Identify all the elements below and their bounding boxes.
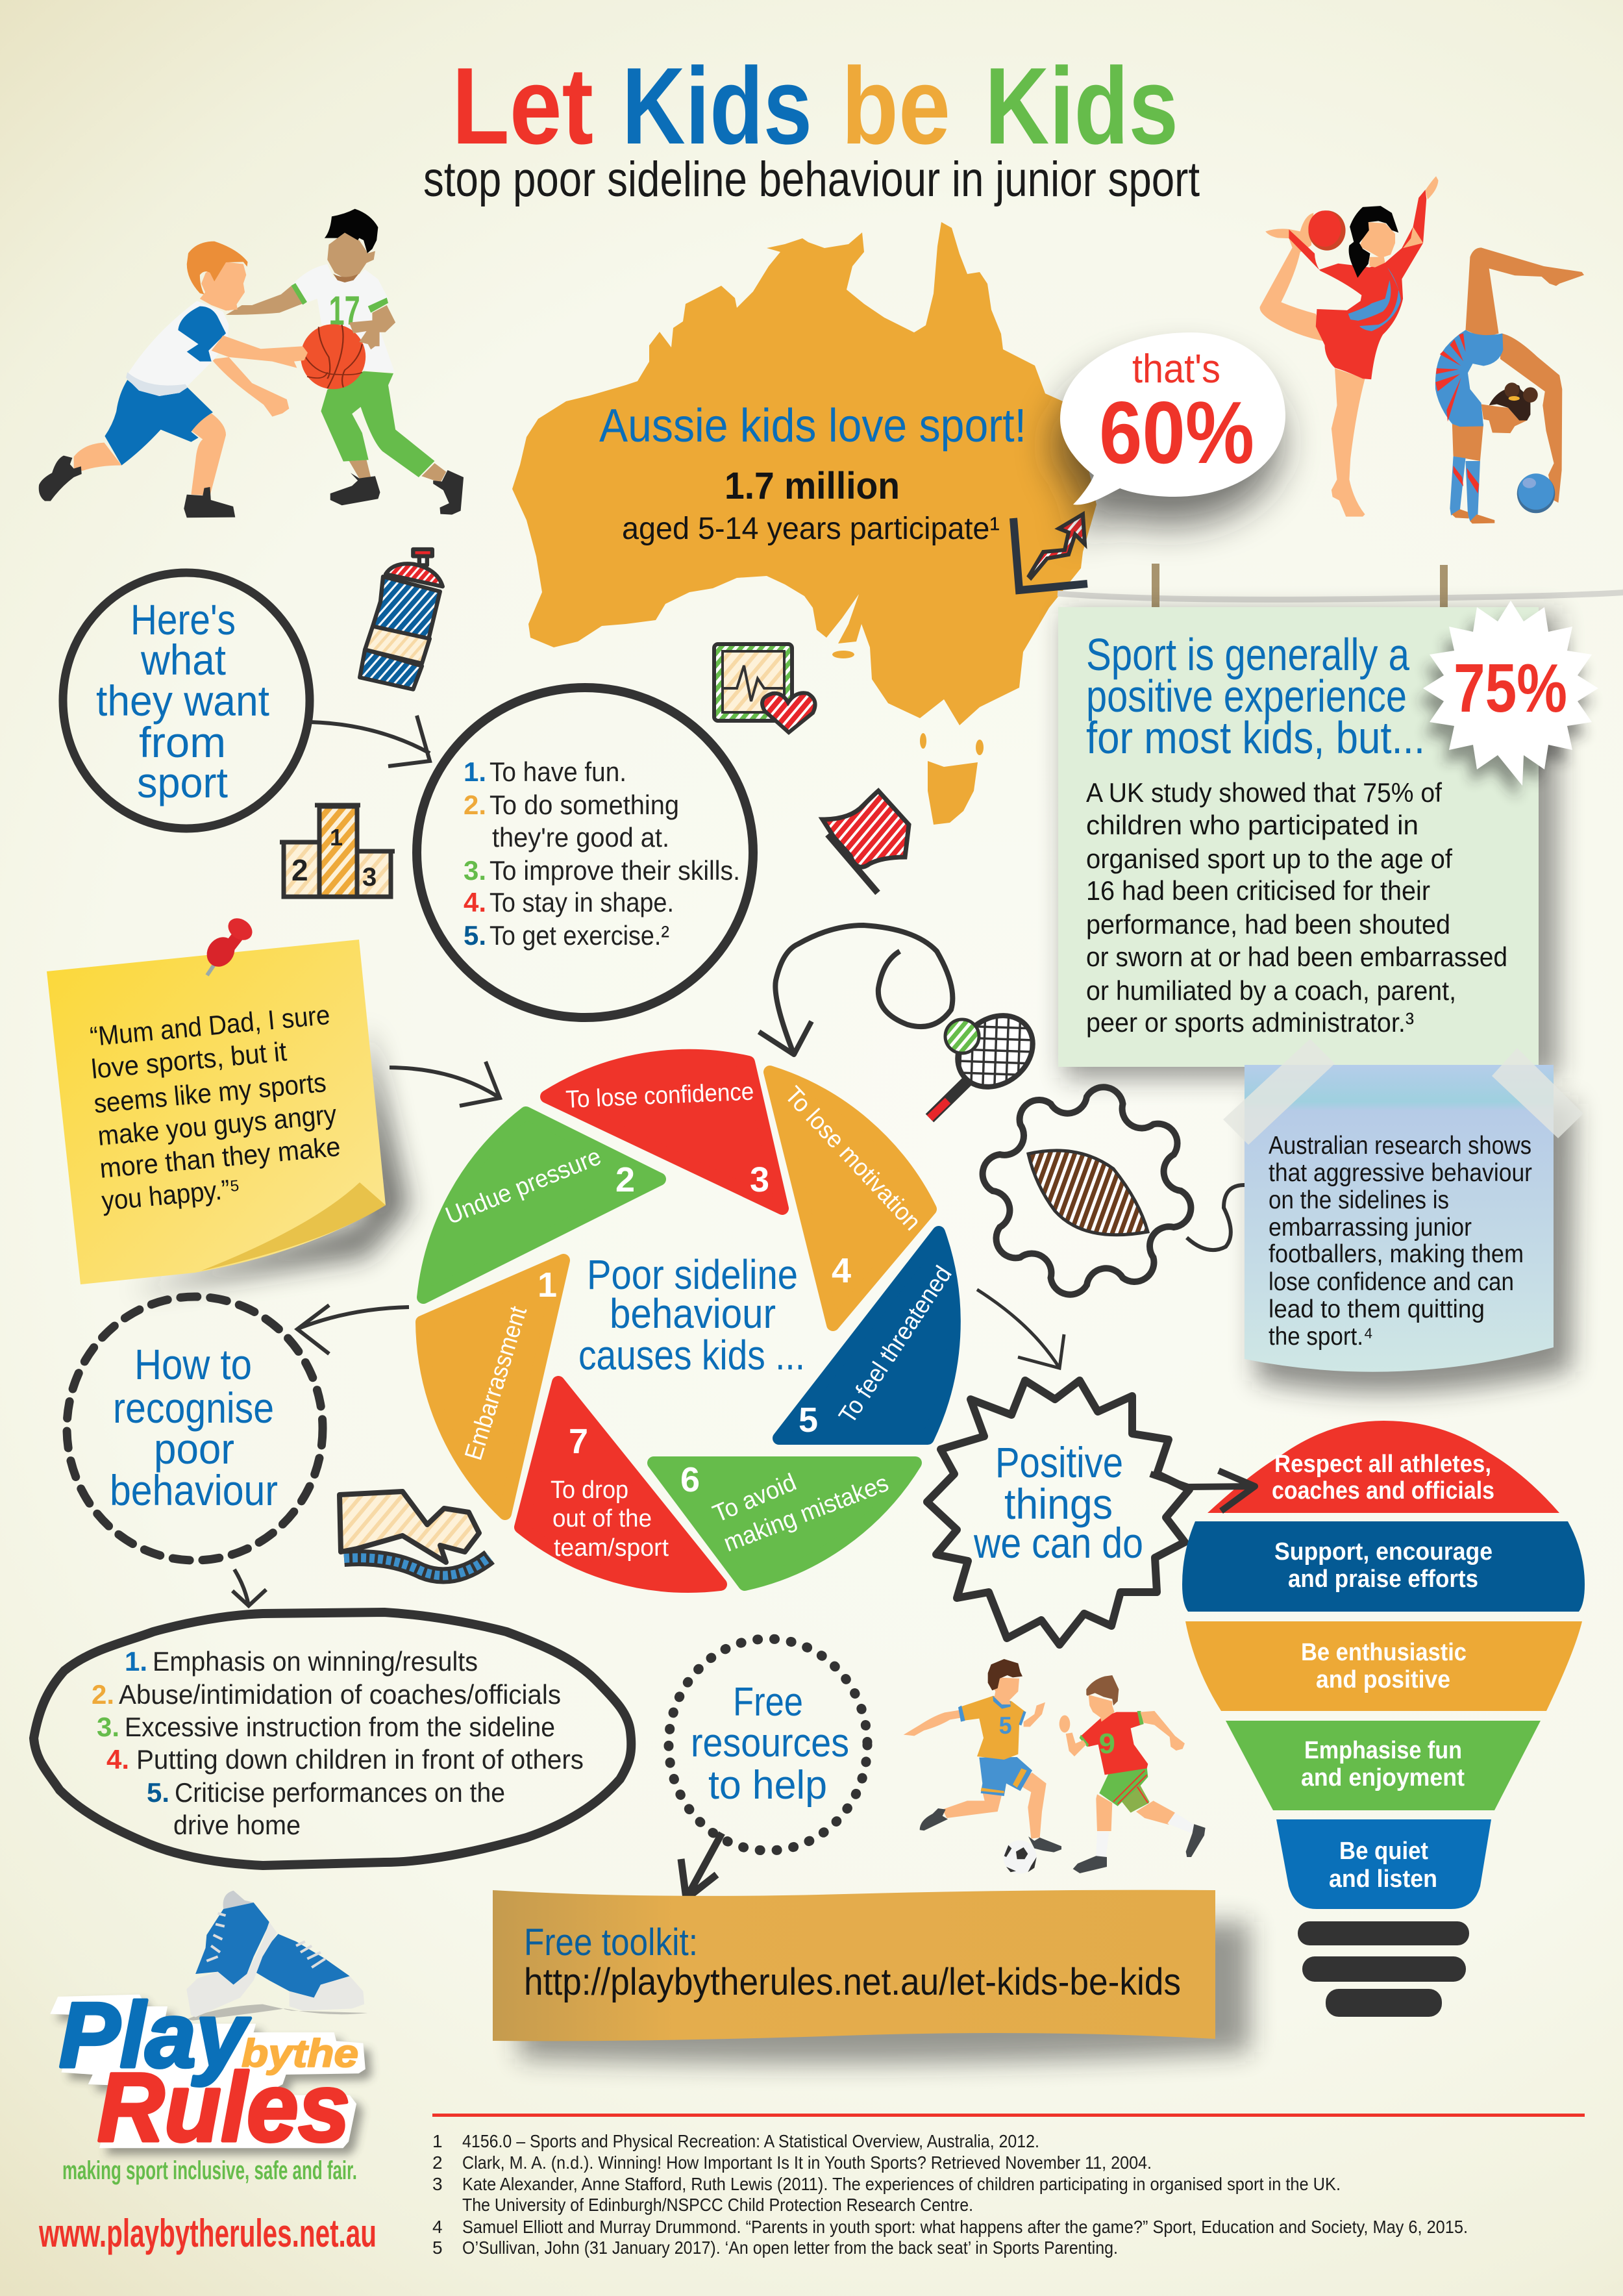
connector: football to note xyxy=(1187,1185,1245,1250)
body text: peer or sports administrator.³ xyxy=(1086,1007,1414,1038)
bulb segment respect: coaches and officials xyxy=(1272,1477,1494,1504)
wheel segment 6 avoid mistakes: making mistakes xyxy=(720,1469,892,1557)
callout: that's 60% xyxy=(1055,332,1285,532)
boy with dark hair: 17 xyxy=(328,288,360,334)
wheel segment 7 drop out xyxy=(521,1382,721,1586)
wheel segment 2 undue pressure xyxy=(423,1113,660,1297)
icon: flag xyxy=(823,791,909,893)
tape strips xyxy=(1223,1039,1583,1145)
illustration: kids playing basketball xyxy=(39,209,464,518)
circle: how to recognise poor behaviour xyxy=(67,1297,323,1560)
bulb segment quiet: and listen xyxy=(1329,1866,1437,1893)
map text xyxy=(599,400,1026,546)
body text: or sworn at or had been embarrassed xyxy=(1086,942,1507,972)
footnotes: 4156.0 – Sports and Physical Recreation: A Statistical Overview, Australia, 2012. xyxy=(462,2131,1039,2151)
heading: positive experience xyxy=(1086,671,1407,721)
circle: wants list: 1. xyxy=(464,756,486,787)
body text: performance, had been shouted xyxy=(1086,909,1450,940)
map text: Aussie kids love sport! xyxy=(599,400,1026,452)
note text: lose confidence and can xyxy=(1269,1268,1514,1296)
icon: push pin xyxy=(201,914,256,975)
illustration: rhythmic gymnasts xyxy=(1260,176,1584,523)
oval: behaviour list: drive home xyxy=(173,1810,301,1840)
boy with dark hair xyxy=(226,209,464,515)
oval: behaviour list: 3. xyxy=(97,1712,119,1742)
circle: free resources: Free xyxy=(733,1680,803,1725)
quote text: more than they make xyxy=(98,1131,341,1184)
note text: embarrassing junior xyxy=(1269,1214,1472,1242)
circle: wants list xyxy=(417,688,753,1017)
panel: free toolkit: http://playbytherules.net.au/let-kids-be-kids xyxy=(524,1961,1181,2003)
icon: podium: 3 xyxy=(362,863,377,892)
footnotes: 3 xyxy=(432,2174,443,2194)
boy with orange hair xyxy=(39,242,308,518)
oval: behaviour list: Excessive instruction from the sideline xyxy=(125,1712,555,1742)
circle: how to recognise poor behaviour: How to xyxy=(134,1340,252,1388)
quote text xyxy=(88,999,341,1216)
footnotes: Samuel Elliott and Murray Drummond. “Parents in youth sport: what happens after the game?” Sport, Education and Society, May 6, 2015. xyxy=(462,2217,1468,2237)
title: be xyxy=(841,45,950,167)
clothesline with pegs xyxy=(1058,564,1623,616)
bulb segment fun xyxy=(1226,1721,1541,1810)
bulb base xyxy=(1298,1921,1469,2017)
image: blue shoes xyxy=(186,1891,367,2021)
bulb segment support: Support, encourage xyxy=(1274,1538,1493,1566)
arrow: wheel to positive things xyxy=(977,1290,1064,1368)
circle: wants list: 2. xyxy=(464,790,486,820)
logo: Play by the Rules: Play xyxy=(59,1984,251,2087)
title xyxy=(452,45,1178,167)
heading: Sport is generally a xyxy=(1086,629,1409,680)
note text xyxy=(1269,1132,1532,1351)
circle: wants list: 4. xyxy=(464,887,486,917)
gymnast in blue xyxy=(1435,247,1584,523)
icon: football in wavy outline xyxy=(983,1087,1191,1295)
callout: that's 60%: 60% xyxy=(1099,383,1254,482)
icon: heart monitor xyxy=(714,644,815,732)
wheel segment 1 embarrassment xyxy=(422,1260,564,1514)
bulb segment quiet xyxy=(1276,1819,1491,1909)
oval: behaviour list: Putting down children in front of others xyxy=(136,1744,584,1775)
circle: how to recognise poor behaviour: behaviour xyxy=(110,1466,278,1514)
bulb segment fun: and enjoyment xyxy=(1301,1764,1465,1791)
boy in red shirt xyxy=(1059,1675,1206,1873)
oval: behaviour list: Criticise performances on the xyxy=(175,1777,505,1808)
circle: here's what they want: they want xyxy=(96,677,269,725)
sticky note: quote xyxy=(47,914,409,1292)
note text: Australian research shows xyxy=(1269,1132,1531,1160)
map text: 1.7 million xyxy=(725,465,900,507)
bulb segment support: and praise efforts xyxy=(1288,1566,1478,1593)
circle: wants list: To have fun. xyxy=(489,756,626,787)
wheel segment 4 lose motivation: To lose motivation xyxy=(779,1081,926,1236)
wheel segment 6 avoid mistakes: 6 xyxy=(680,1460,700,1499)
boy in orange shirt xyxy=(904,1659,1061,1853)
icon: podium: 2 xyxy=(291,853,308,887)
circle: here's what they want: from xyxy=(139,718,226,766)
oval: behaviour list: 1. xyxy=(125,1646,147,1677)
arrow: down to behaviour list xyxy=(232,1569,266,1606)
note text: lead to them quitting xyxy=(1269,1295,1485,1323)
starburst: positive things: we can do xyxy=(973,1519,1143,1567)
circle: wants list: To get exercise.² xyxy=(489,920,669,951)
footnotes xyxy=(432,2114,1585,2258)
illustration: kids playing soccer xyxy=(904,1659,1206,1874)
quote text: make you guys angry xyxy=(96,1099,338,1151)
note text: footballers, making them xyxy=(1269,1240,1524,1268)
wheel segment 1 embarrassment: Embarrassment xyxy=(460,1303,532,1464)
bulb segment enthusiastic: Be enthusiastic xyxy=(1301,1639,1467,1666)
circle: free resources xyxy=(669,1639,867,1851)
map of Australia xyxy=(512,222,1096,825)
boy in red shirt: 9 xyxy=(1099,1728,1115,1760)
wheel segment 3 lose confidence: To lose confidence xyxy=(565,1078,754,1114)
logo: Play by the Rules: bythe xyxy=(242,2032,358,2075)
starburst: positive things xyxy=(927,1380,1189,1645)
circle: wants list: To stay in shape. xyxy=(489,887,674,917)
heading: for most kids, but... xyxy=(1086,712,1425,763)
body text xyxy=(1086,777,1507,1038)
wheel segment 2 undue pressure: Undue pressure xyxy=(442,1143,605,1230)
logo: Play by the Rules xyxy=(50,1984,372,2162)
body text: A UK study showed that 75% of xyxy=(1086,777,1442,808)
body text: organised sport up to the age of xyxy=(1086,843,1452,874)
wheel segment 6 avoid mistakes: To avoid xyxy=(709,1469,800,1528)
hand of dark haired boy xyxy=(349,305,395,349)
basketball xyxy=(301,324,365,389)
arrow: loop to wheel xyxy=(759,925,952,1054)
bulb segment respect: Respect all athletes, xyxy=(1274,1451,1491,1478)
arrow: note to wheel xyxy=(390,1062,500,1106)
circle: here's what they want: sport xyxy=(137,758,228,806)
footnotes: The University of Edinburgh/NSPCC Child Protection Research Centre. xyxy=(462,2195,973,2215)
wheel centre heading: causes kids ... xyxy=(578,1332,805,1379)
note text: the sport.⁴ xyxy=(1269,1323,1373,1351)
oval: behaviour list xyxy=(34,1612,631,1866)
panel: free toolkit xyxy=(493,1890,1250,2064)
gymnast in red xyxy=(1260,176,1438,517)
title: Kids xyxy=(985,45,1178,167)
wheel segment 3 lose confidence xyxy=(547,1056,782,1208)
starburst: positive things: Positive xyxy=(995,1438,1123,1486)
wheel segment 7 drop out: team/sport xyxy=(554,1534,669,1562)
icon: podium: 1 xyxy=(330,824,343,851)
circle: wants list: they're good at. xyxy=(492,822,669,853)
quote text: “Mum and Dad, I sure xyxy=(88,999,331,1052)
panel: Australian research note xyxy=(1223,1039,1583,1392)
circle: wants list: 5. xyxy=(464,920,486,951)
bulb segment enthusiastic: and positive xyxy=(1316,1666,1450,1693)
footnotes: 1 xyxy=(432,2131,443,2151)
bulb segment enthusiastic xyxy=(1185,1621,1582,1711)
note text: that aggressive behaviour xyxy=(1269,1159,1532,1187)
icon: water bottle xyxy=(360,549,443,690)
panel: positive experience xyxy=(1058,601,1598,1078)
circle: here's what they want: what xyxy=(140,636,226,684)
circle: how to recognise poor behaviour: recognise xyxy=(113,1384,274,1432)
heading xyxy=(1086,629,1425,763)
wheel segment 5 feel threatened xyxy=(779,1232,958,1440)
footnotes: O’Sullivan, John (31 January 2017). ‘An open letter from the back seat’ in Sports Parenting. xyxy=(462,2238,1118,2258)
wheel centre heading xyxy=(578,1251,805,1379)
starburst: positive things: things xyxy=(1004,1480,1113,1528)
quote text: seems like my sports xyxy=(92,1067,327,1119)
circle: free resources: to help xyxy=(708,1763,827,1808)
oval: behaviour list: Emphasis on winning/results xyxy=(153,1646,478,1677)
panel: free toolkit: Free toolkit: xyxy=(524,1921,698,1964)
wheel segment 7 drop out: out of the xyxy=(552,1505,652,1532)
footnotes: Kate Alexander, Anne Stafford, Ruth Lewis (2011). The experiences of children participating in organised sport in the UK. xyxy=(462,2174,1341,2194)
wheel segment 1 embarrassment: 1 xyxy=(538,1266,557,1304)
wheel centre heading: behaviour xyxy=(610,1290,776,1337)
bulb segment support xyxy=(1182,1521,1585,1612)
starburst: 75%: 75% xyxy=(1454,650,1567,727)
quote text: love sports, but it xyxy=(90,1036,288,1084)
oval: behaviour list: 5. xyxy=(147,1777,169,1808)
map text: aged 5-14 years participate¹ xyxy=(622,512,1000,546)
soccer ball xyxy=(1003,1840,1037,1874)
logo tagline: making sport inclusive, safe and fair. xyxy=(62,2156,357,2185)
wheel centre heading: Poor sideline xyxy=(587,1251,798,1298)
footnotes: 4 xyxy=(432,2217,443,2237)
arrow: to toolkit xyxy=(681,1833,722,1899)
title: Kids xyxy=(622,45,812,167)
body text: 16 had been criticised for their xyxy=(1086,875,1430,906)
note text: on the sidelines is xyxy=(1269,1186,1449,1214)
icon: podium xyxy=(280,805,395,897)
chart: lightbulb of positive actions xyxy=(1182,1421,1585,2017)
oval: behaviour list: 2. xyxy=(92,1679,114,1710)
chart: sideline behaviour wheel xyxy=(422,1056,958,1586)
wheel segment 6 avoid mistakes xyxy=(654,1460,915,1584)
wheel segment 5 feel threatened: To feel threatened xyxy=(834,1261,958,1429)
bulb segment fun: Emphasise fun xyxy=(1304,1737,1462,1764)
body text: or humiliated by a coach, parent, xyxy=(1086,975,1456,1006)
arrow: to wants list xyxy=(310,716,430,766)
icon: growth chart arrow xyxy=(1013,514,1087,590)
bulb segment respect xyxy=(1208,1421,1559,1513)
circle: wants list: To do something xyxy=(489,790,679,820)
icon: tennis racket and ball xyxy=(930,1001,1047,1118)
body text: children who participated in xyxy=(1086,810,1419,840)
footnotes: Clark, M. A. (n.d.). Winning! How Important Is It in Youth Sports? Retrieved November 11, 2004. xyxy=(462,2152,1152,2173)
callout: that's 60%: that's xyxy=(1132,347,1220,392)
wheel segment 4 lose motivation: 4 xyxy=(832,1251,851,1290)
title: Let xyxy=(452,45,593,167)
subtitle: stop poor sideline behaviour in junior sport xyxy=(423,152,1200,207)
arrow: wheel to recognise circle xyxy=(297,1305,409,1354)
icon: swimmer xyxy=(340,1491,489,1575)
circle: here's what they want: Here's xyxy=(130,595,236,643)
wheel segment 7 drop out: To drop xyxy=(551,1477,628,1504)
wheel segment 4 lose motivation xyxy=(770,1072,930,1325)
footnotes: 2 xyxy=(432,2152,443,2173)
wheel segment 3 lose confidence: 3 xyxy=(750,1160,769,1199)
boy in orange shirt: 5 xyxy=(999,1712,1012,1739)
oval: behaviour list: 4. xyxy=(106,1744,129,1775)
circle: here's what they want xyxy=(63,573,310,829)
wheel segment 7 drop out: 7 xyxy=(569,1422,588,1461)
circle: wants list: 3. xyxy=(464,855,486,886)
logo: Play by the Rules: Rules xyxy=(97,2053,350,2162)
footnotes: 5 xyxy=(432,2238,443,2258)
bulb segment quiet: Be quiet xyxy=(1339,1838,1428,1865)
circle: free resources: resources xyxy=(691,1721,849,1766)
circle: wants list: To improve their skills. xyxy=(489,855,740,886)
starburst: 75% xyxy=(1418,601,1598,799)
wheel segment 5 feel threatened: 5 xyxy=(799,1401,818,1440)
wheel segment 2 undue pressure: 2 xyxy=(615,1160,635,1199)
website address: www.playbytherules.net.au xyxy=(38,2212,377,2255)
oval: behaviour list: Abuse/intimidation of coaches/officials xyxy=(119,1679,561,1710)
quote text: you happy.”⁵ xyxy=(100,1173,242,1216)
arrow: positive things to bulb xyxy=(1150,1471,1255,1511)
circle: how to recognise poor behaviour: poor xyxy=(154,1425,234,1473)
